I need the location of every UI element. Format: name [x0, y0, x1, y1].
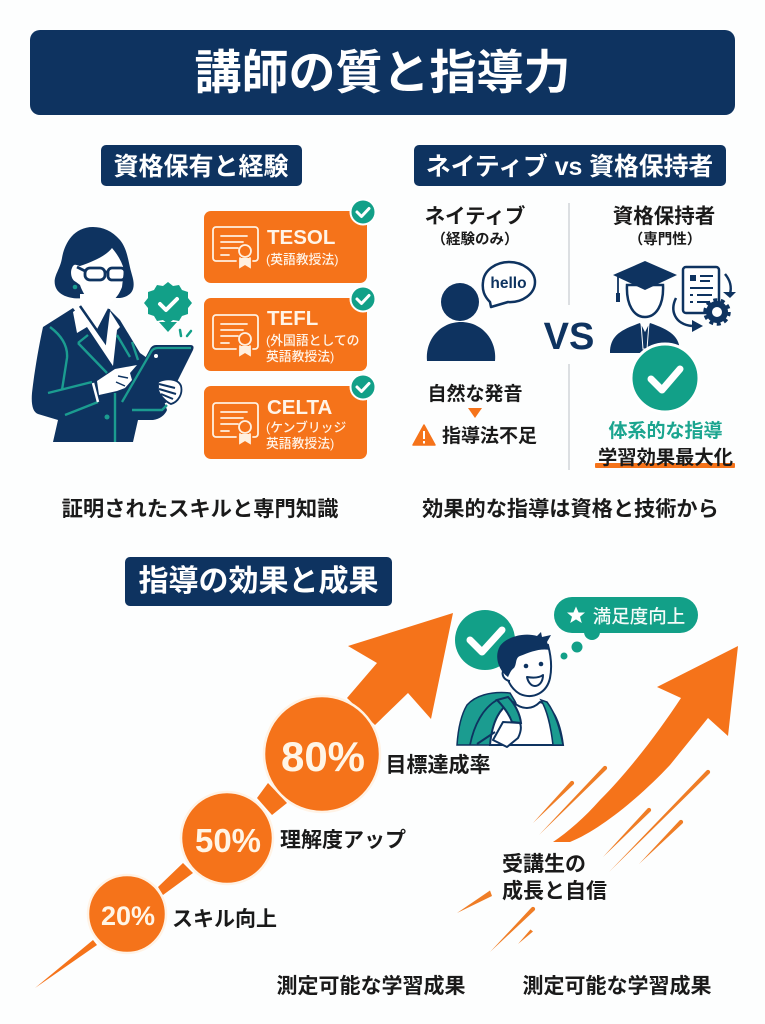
smile — [527, 675, 543, 686]
jacket — [32, 308, 167, 442]
shirt — [490, 702, 563, 745]
heading: qualifications: 資格保有と経験 — [113, 153, 289, 181]
milestone 20 — [88, 875, 166, 953]
neck — [80, 294, 108, 332]
card: CELTA: (ケンブリッジ — [266, 420, 346, 435]
milestone 80 — [264, 696, 380, 812]
card: TESOL — [204, 200, 376, 283]
neck — [516, 688, 539, 707]
illustration: teacher with tablet — [32, 227, 194, 442]
card: CELTA: CELTA — [267, 396, 332, 419]
head — [504, 645, 551, 696]
card: TEFL: 英語教授法) — [266, 349, 334, 364]
native strengths and weaknesses: 自然な発音 — [427, 382, 523, 405]
label: goal rate: 目標達成率 — [386, 753, 490, 777]
label: learner growth: 成長と自信 — [502, 879, 607, 903]
label: understanding: 理解度アップ — [280, 829, 406, 852]
qualified column heading: 資格保持者 — [613, 205, 715, 228]
icon: native speaker with hello bubble: hello — [490, 275, 527, 292]
right strap — [541, 700, 563, 745]
caption: measurable results right: 測定可能な学習成果 — [522, 974, 712, 998]
hair — [55, 227, 134, 298]
heading: native vs qualified: ネイティブ vs 資格保持者 — [426, 152, 713, 181]
arrow shaft and head — [35, 940, 97, 988]
card: TEFL — [204, 286, 376, 371]
fist — [493, 722, 521, 747]
glasses — [77, 267, 125, 280]
card: CELTA: 英語教授法) — [266, 436, 334, 451]
VS label: VS — [544, 316, 594, 358]
caption: effective teaching: 効果的な指導は資格と技術から — [422, 497, 719, 521]
label: learner growth — [502, 853, 607, 903]
icon: graduate with document and gear — [610, 261, 736, 353]
hair — [497, 632, 551, 677]
divider — [568, 203, 570, 470]
chart: rising arrow with speed streaks — [457, 646, 738, 952]
cuff — [93, 383, 98, 402]
callout: satisfaction up: 満足度向上 — [593, 606, 685, 627]
native strengths and weaknesses: 指導法不足 — [442, 425, 537, 447]
heading: results: 指導の効果と成果 — [138, 565, 378, 598]
holding hand — [158, 379, 181, 404]
qualified strengths: 学習効果最大化 — [598, 446, 733, 469]
milestone 80: 80% — [281, 733, 365, 780]
title banner — [30, 30, 735, 115]
pointing hand — [97, 365, 137, 395]
native column heading — [425, 204, 526, 248]
milestone 50 — [181, 792, 273, 884]
ear — [503, 668, 510, 681]
card: TEFL: (外国語としての — [266, 333, 359, 348]
tablet — [122, 345, 194, 404]
title banner: 講師の質と指導力 — [194, 46, 570, 99]
card: TESOL: TESOL — [267, 226, 335, 249]
backpack — [457, 693, 516, 745]
teal lapels and seams — [48, 327, 167, 442]
native column heading: （経験のみ） — [432, 231, 518, 248]
icon: verified badge — [144, 282, 192, 336]
native strengths and weaknesses — [413, 382, 537, 447]
label: learner growth: 受講生の — [502, 853, 586, 876]
card: CELTA — [204, 374, 376, 459]
icon: teal check behind student — [455, 610, 515, 670]
heading: results — [125, 557, 392, 606]
qualified column heading — [613, 205, 715, 248]
milestone 20: 20% — [101, 901, 155, 931]
milestone 50: 50% — [195, 822, 261, 859]
callout: satisfaction up — [554, 597, 698, 660]
shirt collar — [73, 307, 120, 366]
heading: native vs qualified — [414, 145, 726, 186]
card: TEFL: TEFL — [267, 307, 318, 330]
native column heading: ネイティブ — [425, 204, 526, 228]
heading: qualifications — [101, 145, 302, 186]
face — [71, 248, 124, 305]
chart: growth arrow with milestones — [35, 613, 453, 988]
label: skill: スキル向上 — [172, 908, 277, 931]
icon: large teal check — [631, 344, 699, 412]
qualified column heading: （専門性） — [629, 230, 701, 248]
caption: measurable results left: 測定可能な学習成果 — [276, 974, 466, 998]
icon: native speaker with hello bubble — [427, 262, 535, 361]
qualified strengths: 体系的な指導 — [608, 420, 723, 442]
caption: proven skills: 証明されたスキルと専門知識 — [62, 497, 338, 521]
left strap — [497, 697, 521, 723]
qualified strengths — [595, 420, 735, 469]
illustration: happy student — [457, 632, 563, 747]
card: TESOL: (英語教授法) — [266, 252, 339, 267]
